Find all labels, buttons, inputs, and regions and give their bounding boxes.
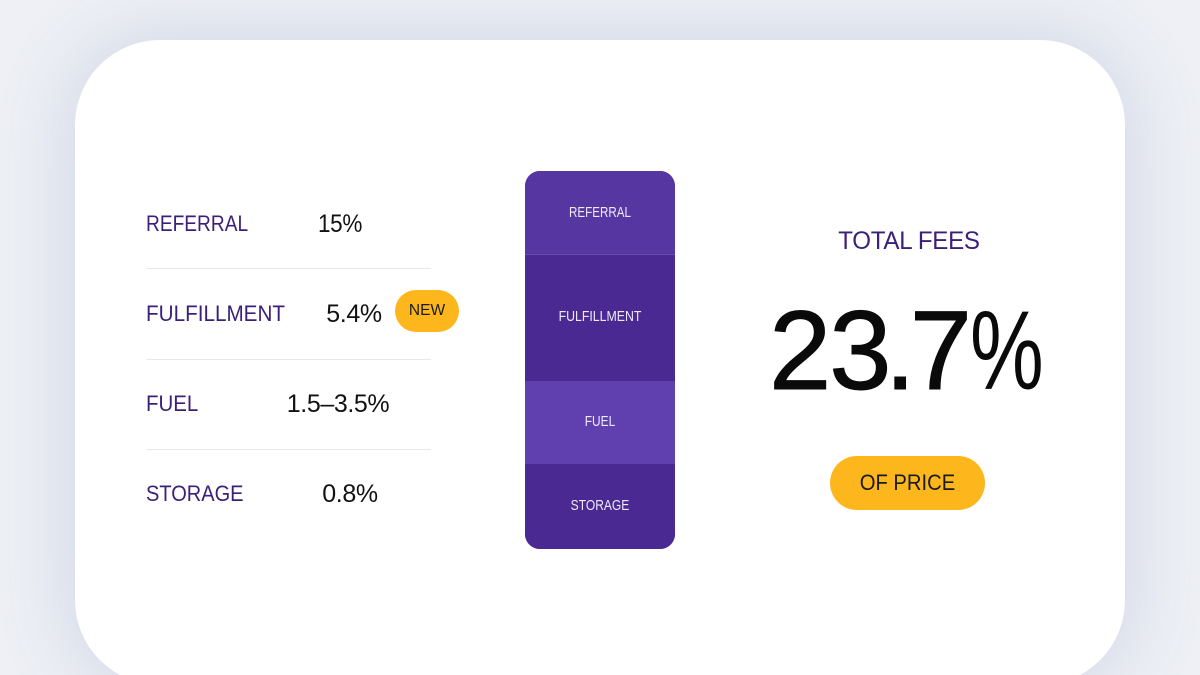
segment: fuel	[525, 381, 675, 464]
label: fulfillment: FULFILLMENT	[146, 301, 285, 326]
big number: %	[970, 288, 1044, 413]
segment: storage	[525, 464, 675, 549]
label: fuel: FUEL	[146, 391, 198, 416]
value: referral: 15%	[318, 210, 362, 238]
total fees heading: TOTAL FEES	[838, 227, 980, 255]
segment: referral: REFERRAL	[569, 205, 631, 221]
segment: fulfillment	[525, 254, 675, 381]
big number: 23.7	[769, 288, 970, 413]
segment: referral	[525, 171, 675, 254]
stacked bar	[525, 171, 675, 549]
badge: new	[395, 290, 459, 332]
label: referral: REFERRAL	[146, 211, 248, 236]
value: storage: 0.8%	[322, 480, 378, 508]
segment: fulfillment: FULFILLMENT	[559, 309, 641, 325]
segment: storage: STORAGE	[571, 498, 629, 514]
badge: new: NEW	[409, 302, 445, 319]
value: fuel: 1.5–3.5%	[287, 390, 389, 418]
panel: fee list	[146, 210, 459, 508]
segment: fuel: FUEL	[585, 414, 615, 430]
label: storage: STORAGE	[146, 481, 244, 506]
pill: of price	[830, 456, 985, 510]
pill: of price: OF PRICE	[860, 470, 955, 495]
value: fulfillment: 5.4%	[326, 300, 382, 328]
